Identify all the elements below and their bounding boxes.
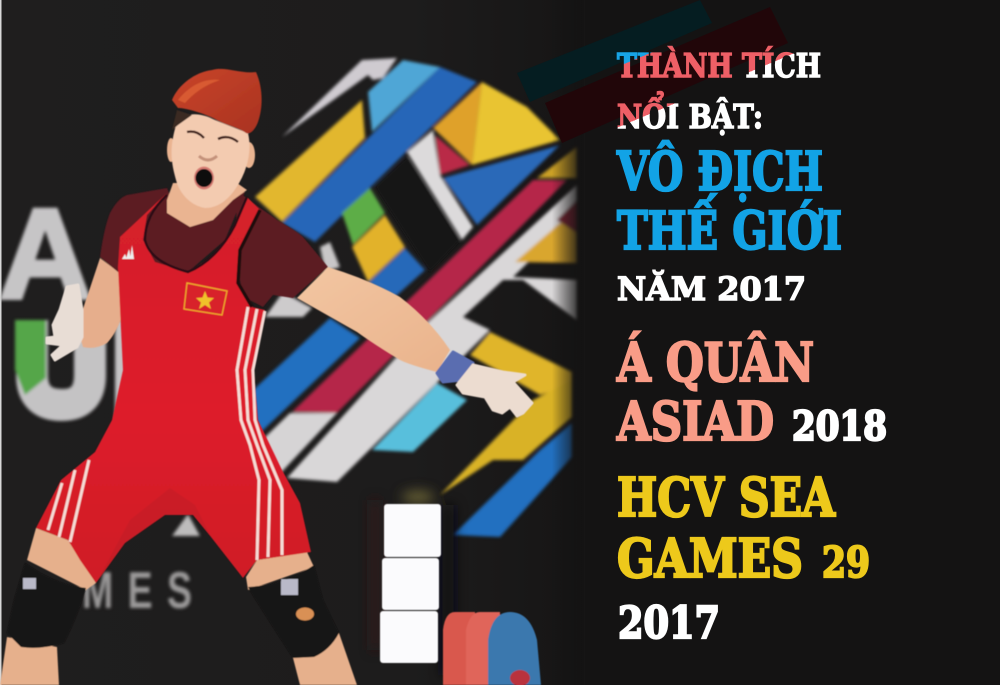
backdrop word GAMES: MES — [82, 561, 206, 619]
hair — [172, 69, 262, 133]
knee details — [23, 578, 314, 620]
singlet collar trim — [145, 195, 247, 272]
lower legs — [0, 528, 357, 685]
face — [172, 114, 250, 208]
maroon shirt — [100, 188, 328, 307]
eyes and brows — [187, 132, 238, 142]
armhole trim — [238, 210, 260, 307]
backdrop base triangle — [172, 514, 200, 536]
knee sleeves — [7, 563, 339, 658]
sea games gold text — [617, 467, 870, 590]
singlet stripes — [48, 307, 282, 560]
asiad runner-up text: Á QUÂN — [616, 332, 814, 394]
fade of photo into black — [552, 0, 584, 685]
athlete — [0, 69, 532, 685]
scoreboard lights — [380, 504, 441, 663]
sea games gold text: HCV SEA — [617, 467, 836, 529]
world champion text — [616, 141, 842, 262]
scoreboard glow — [372, 491, 454, 675]
backdrop letter A: A — [0, 183, 91, 326]
nose — [199, 156, 217, 160]
right arm — [297, 267, 450, 372]
world champion text: VÔ ĐỊCH — [616, 141, 823, 203]
left arm — [78, 258, 123, 348]
dark red diagonal band — [545, 7, 788, 143]
edge highlight — [0, 0, 2, 685]
barbell plates — [443, 612, 541, 685]
torso shading — [96, 488, 211, 583]
world champion text: THẾ GIỚI — [617, 193, 842, 262]
ears — [167, 138, 255, 168]
backdrop logo stripes — [0, 58, 577, 619]
backdrop letter U — [32, 320, 90, 405]
asiad runner-up text: ASIAD — [616, 391, 774, 453]
neck — [167, 183, 247, 227]
left hand — [47, 285, 82, 360]
asiad runner-up text — [616, 332, 887, 453]
year 2017 label: NĂM 2017 — [617, 270, 806, 308]
side hair — [172, 110, 192, 130]
headline: thành tích nổi bật: THÀNH TÍCH — [617, 45, 821, 85]
wristband — [437, 352, 473, 382]
asiad runner-up text: 2018 — [792, 403, 887, 450]
mouth — [194, 166, 214, 190]
sea games gold text: 29 — [822, 538, 870, 587]
sea games year: 2017 — [618, 598, 720, 649]
red singlet — [36, 193, 311, 583]
photo backdrop — [0, 0, 585, 685]
sea games gold text: GAMES — [617, 528, 803, 590]
headline: thành tích nổi bật: NỔI BẬT: — [617, 90, 763, 136]
headline: thành tích nổi bật — [617, 45, 821, 136]
adidas mark — [122, 245, 134, 259]
flag patch — [184, 283, 227, 315]
right hand — [457, 365, 532, 416]
dark teal diagonal band — [517, 0, 712, 102]
